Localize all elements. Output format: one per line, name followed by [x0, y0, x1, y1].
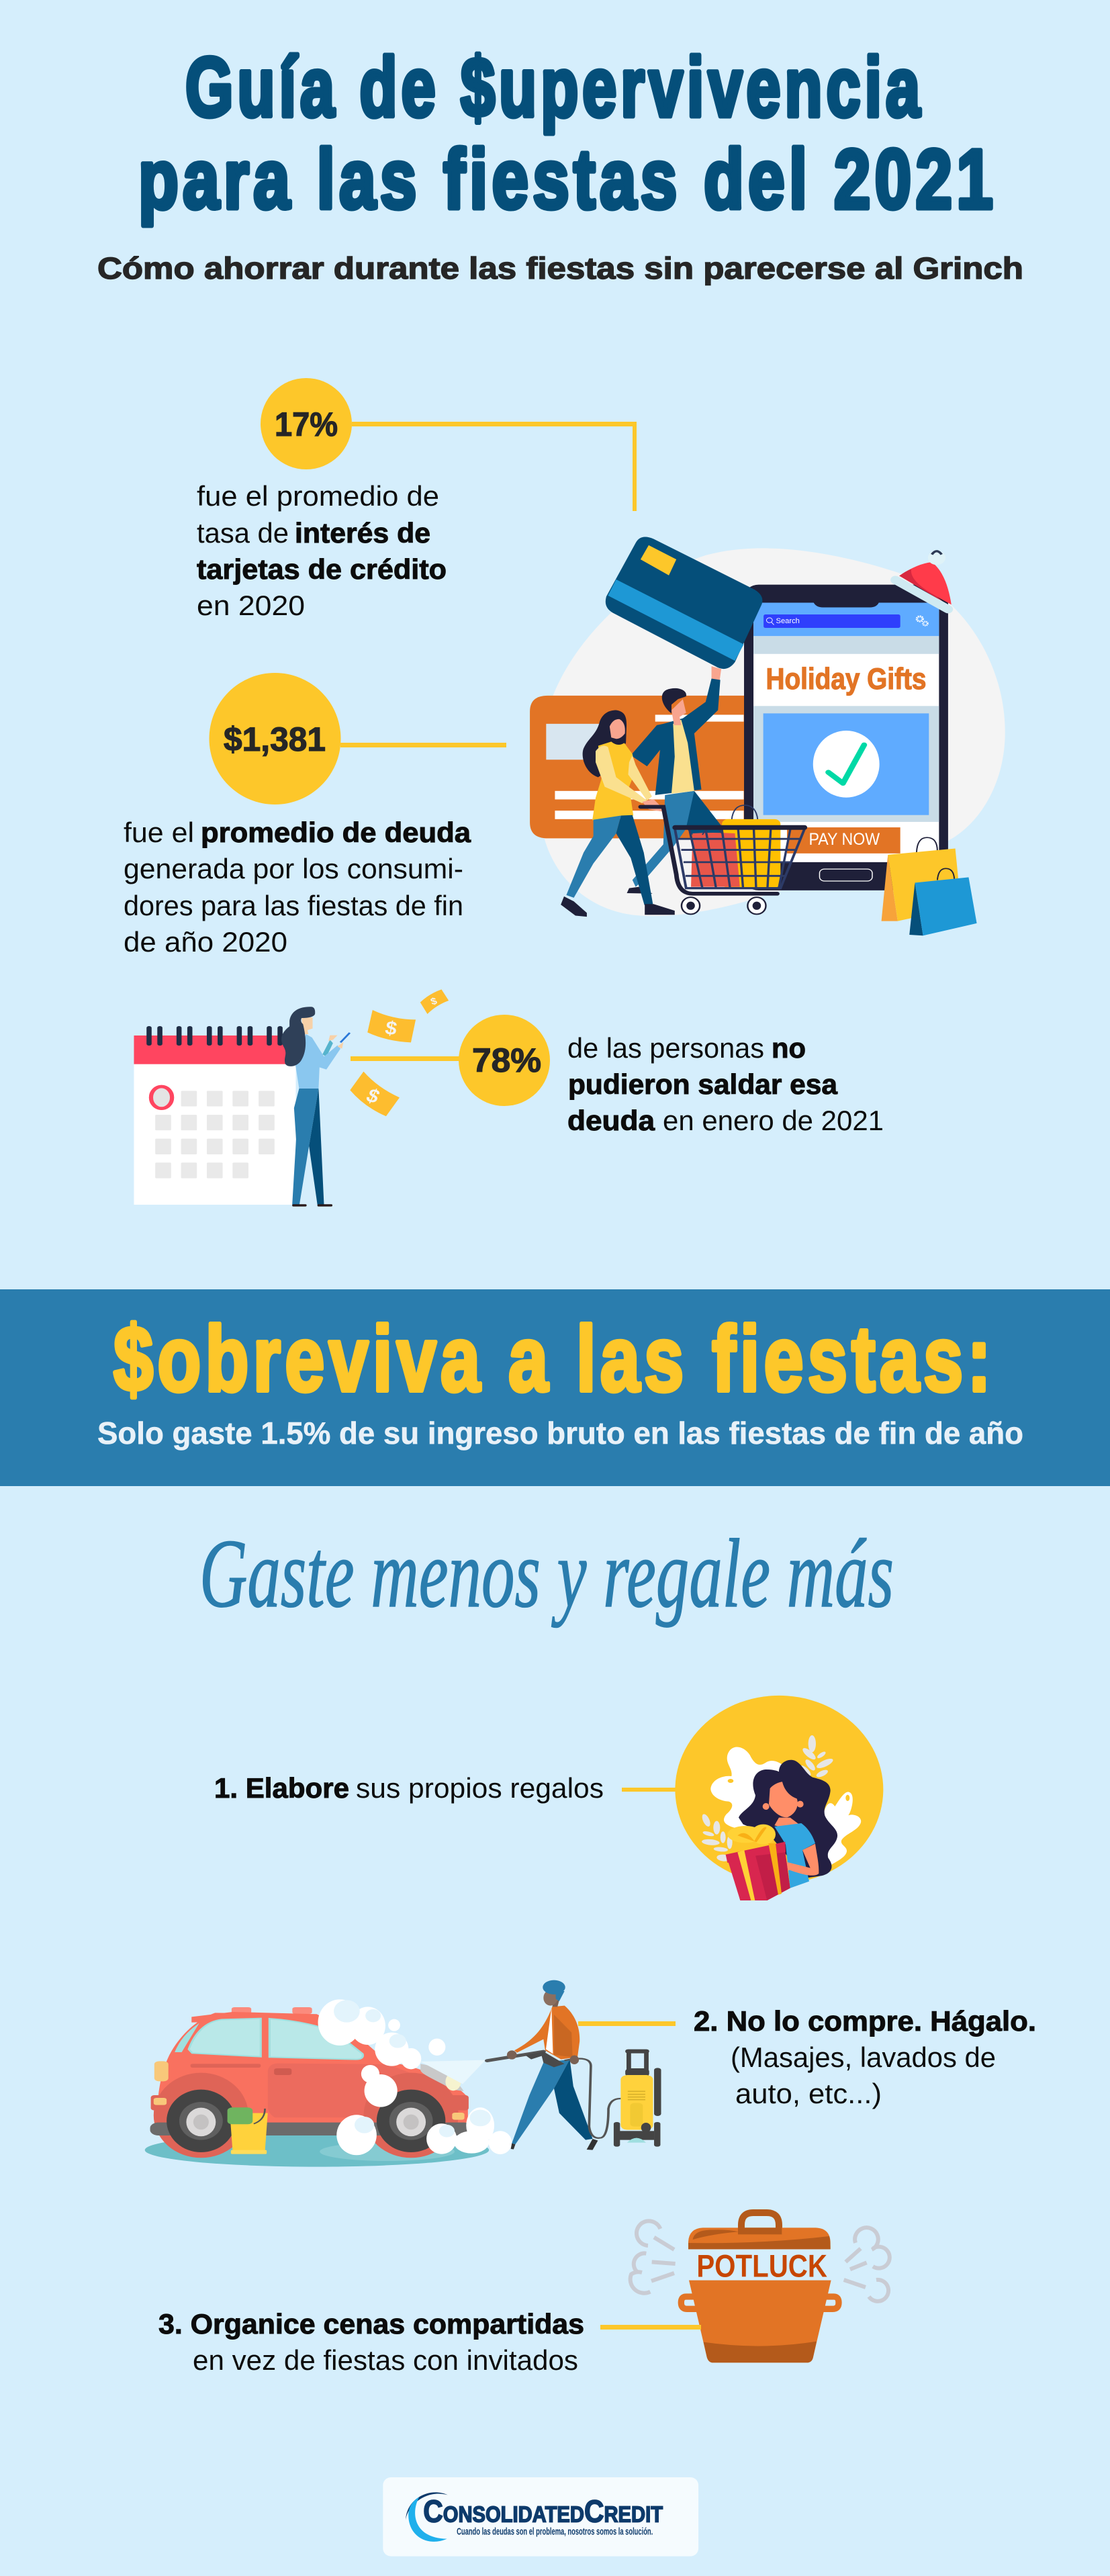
- woman with phone: [281, 1007, 350, 1207]
- big blue credit card: [606, 537, 762, 669]
- logo tagline: Cuando las deudas son el problema, nosotros somos la solución.: [457, 2527, 653, 2537]
- text: unpaid debt: deuda: [567, 1105, 655, 1136]
- man with pressure washer: [488, 1980, 661, 2150]
- tip 2 text: auto, etc...): [735, 2078, 882, 2109]
- stat: $1,381: $1,381: [224, 721, 326, 758]
- text: unpaid debt: pudieron saldar esa: [568, 1068, 838, 1100]
- tip 3 connector: [600, 2325, 701, 2330]
- calendar: [134, 1026, 296, 1205]
- tip 1 connector: [622, 1788, 676, 1792]
- smartphone: Holiday Gifts: [766, 663, 926, 696]
- text: unpaid debt: [567, 1032, 884, 1136]
- woman: [739, 1760, 837, 1888]
- steam: [631, 2221, 890, 2301]
- gift box: [726, 1825, 790, 1900]
- logo: Consolidated Credit: [383, 2477, 698, 2557]
- text: interest rate: tasa de: [197, 517, 289, 549]
- POTLUCK label: POTLUCK: [696, 2249, 827, 2285]
- title: [138, 41, 997, 226]
- logo wordmark: CONSOLIDATEDCREDIT: [423, 2494, 663, 2529]
- stat: 17%: 17%: [275, 406, 338, 443]
- tip 3 text: [158, 2308, 584, 2376]
- woman: [561, 710, 675, 917]
- white blobs and leaves: [700, 1735, 861, 1865]
- subtitle: Cómo ahorrar durante las fiestas sin parecerse al Grinch: [97, 251, 1023, 285]
- tip 2 text: 2. No lo compre. Hágalo.: [694, 2005, 1036, 2037]
- car: [145, 2007, 489, 2167]
- tip 2 connector: [578, 2021, 676, 2026]
- flying dollar bills: $: [429, 995, 438, 1007]
- stat: 78%: 78%: [472, 1042, 541, 1079]
- orange credit card: [530, 696, 745, 838]
- stat: 78%: [351, 1015, 550, 1106]
- text: average debt: fue el: [124, 817, 194, 848]
- text: unpaid debt: de las personas: [567, 1032, 764, 1064]
- text: interest rate: tarjetas de crédito: [197, 553, 447, 585]
- shopping cart: [641, 805, 807, 914]
- smartphone: [744, 585, 948, 890]
- text: interest rate: en 2020: [197, 590, 305, 621]
- logo swoosh: [406, 2492, 448, 2542]
- tip 1 text: sus propios regalos: [356, 1772, 604, 1804]
- flying dollar bills: $: [363, 1085, 383, 1108]
- flying dollar bills: $: [383, 1017, 399, 1040]
- illustration: phone shopping: [530, 537, 1005, 935]
- flying dollar bills: [350, 989, 449, 1116]
- santa hat: [895, 551, 952, 609]
- tip 3 text: en vez de fiestas con invitados: [193, 2344, 578, 2376]
- man: [627, 666, 725, 894]
- tip 1 text: [214, 1772, 604, 1804]
- text: unpaid debt: no: [772, 1032, 806, 1064]
- smartphone: PAY NOW: [808, 829, 880, 849]
- bucket: [228, 2107, 268, 2154]
- text: interest rate: interés de: [295, 517, 430, 549]
- text: average debt: [124, 817, 471, 958]
- illustration: potluck pot: [631, 2213, 890, 2362]
- tip 1 text: 1. Elabore: [214, 1772, 349, 1804]
- illustration: calendar and woman: [134, 989, 449, 1207]
- text: average debt: promedio de deuda: [201, 817, 471, 848]
- text: unpaid debt: en enero de 2021: [663, 1105, 884, 1136]
- text: average debt: de año 2020: [124, 926, 287, 958]
- soap foam: [318, 1999, 512, 2155]
- pot body: [681, 2281, 839, 2362]
- text: interest rate: [197, 480, 447, 621]
- banner subheading: Solo gaste 1.5% de su ingreso bruto en las fiestas de fin de año: [97, 1416, 1023, 1451]
- stat: 17%: [261, 378, 637, 511]
- smartphone: Search: [776, 616, 800, 625]
- text: interest rate: fue el promedio de: [197, 480, 439, 512]
- shopping bags: [882, 837, 977, 935]
- illustration: car wash: [145, 1980, 661, 2167]
- banner: survive the holidays: [0, 1289, 1110, 1486]
- stat: $1,381: [210, 673, 506, 804]
- illustration: woman with gift: [675, 1696, 883, 1900]
- tip 2 text: [694, 2005, 1036, 2109]
- text: average debt: generada por los consumi-: [124, 853, 463, 884]
- tip 3 text: 3. Organice cenas compartidas: [158, 2308, 584, 2340]
- water spray: [420, 2060, 485, 2084]
- pot lid: [688, 2213, 831, 2249]
- tip 2 text: (Masajes, lavados de: [731, 2041, 996, 2073]
- text: average debt: dores para las fiestas de fin: [124, 890, 463, 921]
